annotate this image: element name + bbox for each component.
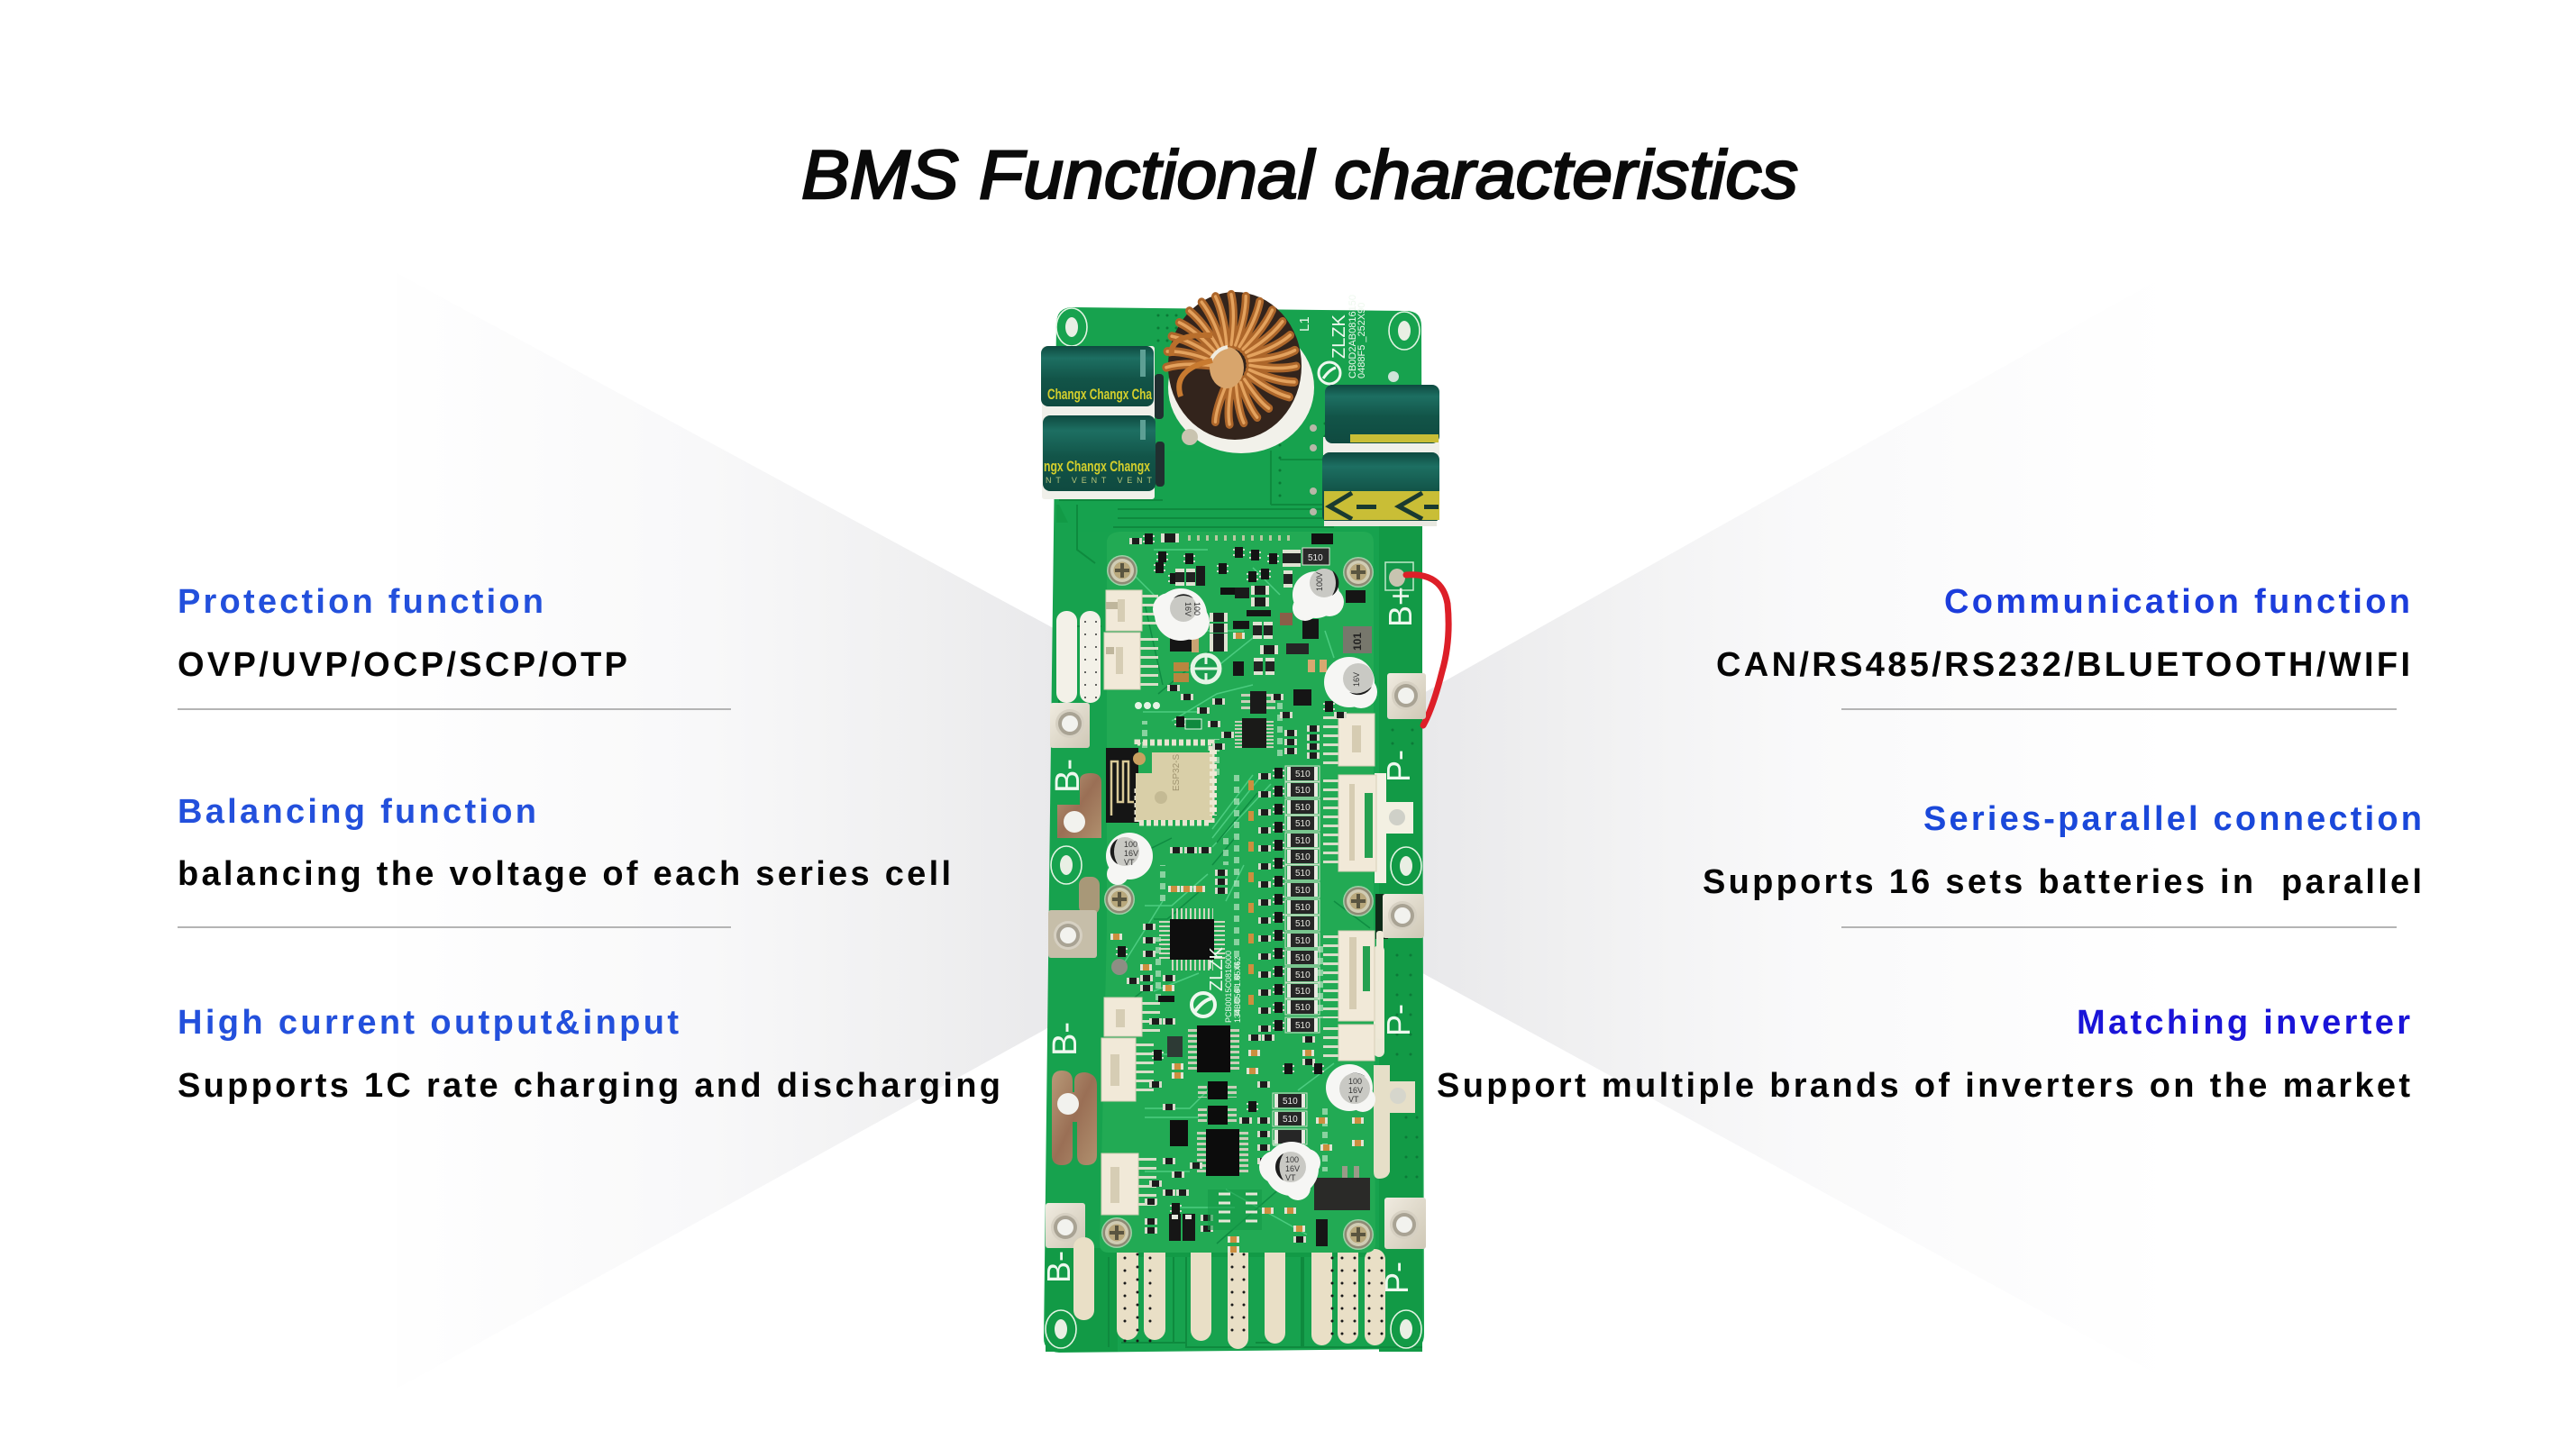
- copper pad H shape: [1052, 1071, 1097, 1165]
- heading: protection function: Protection function: [178, 583, 544, 621]
- ESP32 wireless module: ESP32-S: [1172, 754, 1182, 791]
- capacitors, top left: ngx Changx Changx: [1044, 458, 1150, 475]
- electrolytic capacitors with white glue: VT: [1348, 1095, 1359, 1104]
- terminal bracket right 3: [1384, 1198, 1426, 1249]
- left solder pads: [1056, 611, 1101, 703]
- 510 resistor column: 510: [1295, 786, 1311, 796]
- 510 resistor column: 510: [1295, 936, 1311, 946]
- electrolytic capacitors with white glue: 100V: [1315, 572, 1324, 591]
- capacitors, top left: Changx Changx Cha: [1047, 386, 1152, 403]
- 510 resistor column: 510: [1295, 903, 1311, 913]
- electrolytic capacitors with white glue: VT: [1124, 858, 1135, 867]
- large 510 resistors lower: [1273, 1093, 1307, 1144]
- 510 resistor column: 510: [1295, 819, 1311, 829]
- terminal bracket left 2: [1048, 910, 1097, 958]
- 510 resistor column: 510: [1295, 919, 1311, 929]
- copper pad upper: [1057, 773, 1101, 838]
- right pad T lower: [1374, 1065, 1415, 1179]
- 510 resistor column: 510: [1295, 836, 1311, 846]
- connectors left: [1101, 590, 1151, 1215]
- label P- top: P-: [1380, 750, 1417, 782]
- 510 resistor column: [1285, 766, 1320, 1033]
- electrolytic capacitors with white glue: VT: [1285, 1173, 1296, 1182]
- panel: matching inverter: [1437, 1004, 2410, 1105]
- 510 resistor column: 510: [1295, 971, 1311, 980]
- capacitors, top left: [1041, 346, 1165, 499]
- description: charge rate: Supports 1C rate charging and discharging: [178, 1067, 1000, 1105]
- top silkscreen markings: 0488F5 _252X90: [1357, 303, 1367, 378]
- heading: communication function: Communication function: [1944, 583, 2410, 621]
- heading: matching inverter: Matching inverter: [2077, 1004, 2410, 1042]
- label P- middle: P-: [1380, 1004, 1417, 1036]
- mounting holes: [1046, 308, 1421, 1348]
- electrolytic capacitors with white glue: 100: [1285, 1155, 1299, 1164]
- silkscreen details on control board: PCB0015C0816000: [1224, 951, 1233, 1023]
- label P- bottom: P-: [1378, 1262, 1415, 1294]
- background wedge: left: [397, 273, 1082, 1389]
- integrated circuits: [1158, 533, 1372, 1246]
- 510 resistor column: 510: [1295, 803, 1311, 813]
- terminal bracket right 2: [1375, 894, 1424, 939]
- panel: balancing function: [178, 793, 951, 893]
- balancing transistors and small resistors column: [1248, 768, 1284, 1032]
- 510 resistor column: 510: [1295, 770, 1311, 779]
- right pad strip: [1374, 945, 1384, 1057]
- right pad T shape: [1375, 773, 1413, 883]
- small surface-mount components: [1110, 533, 1364, 1253]
- large 510 resistors lower: 510: [1283, 1115, 1298, 1125]
- electrolytic capacitors with white glue: 100: [1192, 602, 1201, 615]
- title: BMS Functional characteristics: [801, 137, 1798, 214]
- description: protection list: OVP/UVP/OCP/SCP/OTP: [178, 646, 627, 684]
- 510 resistor column: 510: [1295, 953, 1311, 963]
- 510 resistor column: 510: [1295, 886, 1311, 896]
- description: inverter brands: Support multiple brands of inverters on the market: [1437, 1067, 2410, 1105]
- heading: high current: High current output&input: [178, 1004, 679, 1042]
- screws: [1101, 555, 1374, 1250]
- terminal bracket left 1: [1050, 703, 1090, 748]
- top silkscreen markings: [1297, 295, 1399, 384]
- 510 resistor column: 510: [1295, 852, 1311, 862]
- description: protocols: CAN/RS485/RS232/BLUETOOTH/WIFI: [1716, 646, 2410, 684]
- heading: series-parallel: Series-parallel connection: [1923, 800, 2422, 838]
- right green vias: [1393, 730, 1417, 1189]
- ESP32 wireless module: [1106, 743, 1213, 823]
- terminal bracket right 1: [1387, 673, 1426, 719]
- electrolytic capacitors with white glue: 16V: [1348, 1086, 1363, 1095]
- daughter control board: [1100, 532, 1375, 1253]
- 510 resistor column: 510: [1295, 1021, 1311, 1031]
- top silkscreen markings: CB0D2AB0816150: [1347, 295, 1358, 378]
- panel: high current: [178, 1004, 1000, 1105]
- electrolytic capacitors with white glue: 16V: [1183, 602, 1192, 616]
- label B- second: B-: [1046, 1022, 1084, 1056]
- red wire: [1406, 575, 1448, 725]
- connectors right: [1331, 714, 1384, 1061]
- background wedge: right: [1406, 267, 2181, 1388]
- silkscreen details on control board: [1111, 655, 1242, 1023]
- bottom solder pads: [1073, 1237, 1385, 1349]
- board base: [1044, 307, 1424, 1353]
- 510 resistor column: 510: [1295, 987, 1311, 997]
- electrolytic capacitors with white glue: 16V: [1285, 1164, 1300, 1173]
- silkscreen details on control board: 134BC56 1.65X62: [1233, 956, 1242, 1023]
- integrated circuits: 510: [1308, 553, 1323, 563]
- white adhesive disc under inductor: [1168, 322, 1314, 453]
- panel: series-parallel connection: [1703, 800, 2422, 901]
- electrolytic capacitors with white glue: 16V: [1352, 672, 1361, 687]
- heading: balancing function: Balancing function: [178, 793, 536, 831]
- electrolytic capacitors with white glue: [1106, 569, 1377, 1200]
- toroid inductor coil: [1166, 292, 1302, 445]
- capacitors, top right: [1310, 385, 1439, 526]
- top silkscreen markings: ZLZK: [1329, 314, 1349, 359]
- electrolytic capacitors with white glue: 16V: [1124, 849, 1138, 858]
- label B- third: B-: [1040, 1251, 1077, 1283]
- 510 resistor column: 510: [1295, 1003, 1311, 1013]
- B+ terminal and label: [1382, 562, 1419, 627]
- silkscreen texture: [1145, 703, 1325, 1180]
- lower-left metal tab: [1079, 877, 1100, 915]
- electrolytic capacitors with white glue: 100: [1124, 840, 1137, 849]
- panel: protection function: [178, 583, 627, 684]
- terminal bracket left 3: [1046, 1203, 1085, 1248]
- top silkscreen markings: L1: [1297, 316, 1312, 332]
- electrolytic capacitors with white glue: 100: [1348, 1077, 1362, 1086]
- silkscreen details on control board: ZLZK: [1207, 946, 1227, 991]
- capacitors, top left: NT VENT VENT: [1046, 476, 1152, 485]
- description: parallel sets: Supports 16 sets batteries in parallel: [1703, 863, 2422, 901]
- integrated circuits: 101: [1351, 633, 1364, 651]
- large 510 resistors lower: 510: [1283, 1097, 1298, 1107]
- label B-: B-: [1049, 759, 1087, 793]
- BMS circuit board photo illustration: [1040, 292, 1448, 1353]
- 510 resistor column: 510: [1295, 869, 1311, 879]
- panel: communication function: [1716, 583, 2410, 684]
- B+ terminal and label: B+: [1382, 587, 1419, 627]
- description: balancing: balancing the voltage of each series cell: [178, 855, 951, 893]
